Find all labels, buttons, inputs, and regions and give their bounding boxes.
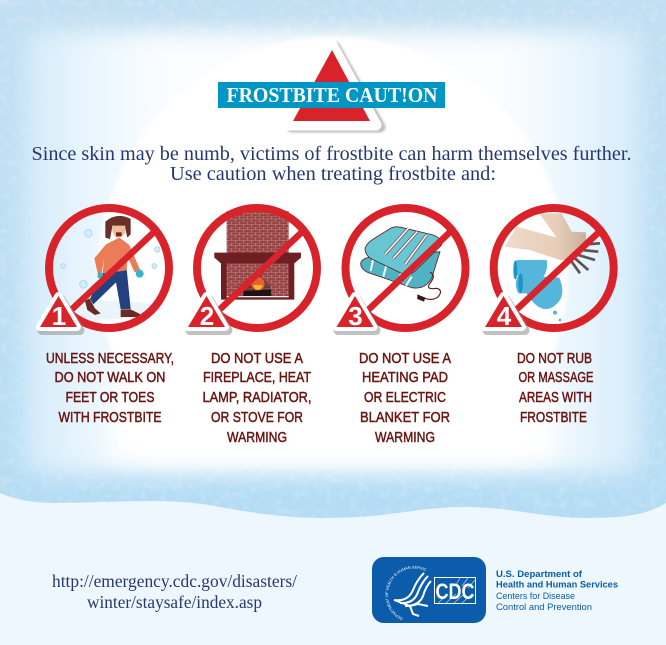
- caption: OR MASSAGE: [518, 369, 594, 386]
- icon: HHS eagle seal: DEPARTMENT OF HEALTH & HUMAN SERVICES USA: [385, 566, 426, 620]
- banner: [218, 82, 445, 108]
- caption: DO NOT RUB: [517, 350, 592, 367]
- heading: FROSTBITE CAUT!ON: [226, 83, 438, 107]
- panel: do not walk: [40, 208, 174, 426]
- caption: UNLESS NECESSARY,: [46, 350, 174, 367]
- caption: AREAS WITH: [519, 389, 592, 406]
- prohibition ring: [346, 208, 466, 328]
- caption: BLANKET FOR: [360, 409, 450, 426]
- number badge 4: 4: [497, 301, 512, 331]
- panel: do not rub: [485, 208, 614, 426]
- snow hill footer: [0, 493, 666, 645]
- caption: WARMING: [227, 429, 287, 446]
- panel: do not use heating pad: [336, 208, 466, 446]
- caption: WITH FROSTBITE: [58, 409, 162, 426]
- number badge 3: 3: [348, 301, 363, 331]
- caption: OR STOVE FOR: [211, 409, 303, 426]
- intro text: Since skin may be numb, victims of frostbite can harm themselves further.: [32, 143, 632, 165]
- caption: [202, 350, 312, 446]
- caption: FEET OR TOES: [66, 389, 154, 406]
- illustration: rubbing hands and blue gloves: [505, 213, 600, 321]
- agency name: U.S. Department of: [496, 569, 583, 580]
- caption: OR ELECTRIC: [364, 389, 446, 406]
- caption: [359, 350, 451, 446]
- caption: WARMING: [375, 429, 435, 446]
- illustration: walking person: [60, 216, 160, 319]
- caption: FIREPLACE, HEAT: [203, 369, 311, 386]
- panel: do not use fireplace: [188, 208, 317, 446]
- intro text: [32, 143, 632, 185]
- prohibition ring: [49, 208, 169, 328]
- illustration: electric blanket: [361, 227, 442, 302]
- number badge 2: 2: [200, 301, 214, 331]
- caption: DO NOT USE A: [211, 350, 303, 367]
- source url: [52, 571, 297, 612]
- intro text: Use caution when treating frostbite and:: [170, 163, 496, 185]
- agency name: Health and Human Services: [496, 580, 618, 590]
- number badge 1: [40, 296, 80, 331]
- prohibition ring: [494, 208, 614, 328]
- caption: LAMP, RADIATOR,: [202, 389, 312, 406]
- caption: DO NOT WALK ON: [54, 369, 166, 386]
- caption: [46, 350, 174, 426]
- number badge 3: [336, 296, 376, 331]
- caption: FROSTBITE: [520, 409, 587, 426]
- source url: http://emergency.cdc.gov/disasters/: [52, 571, 297, 591]
- icon: HHS eagle seal: [385, 566, 432, 620]
- icon: caution triangle: [288, 45, 380, 127]
- caption: DO NOT USE A: [359, 350, 451, 367]
- illustration: fireplace: [214, 211, 301, 300]
- agency name: Control and Prevention: [496, 602, 592, 613]
- agency name: [496, 569, 618, 613]
- icon: CDC mark: CDC: [436, 579, 475, 604]
- title badge: [218, 45, 445, 127]
- caption: HEATING PAD: [362, 369, 448, 386]
- agency name: Centers for Disease: [496, 591, 575, 602]
- prohibition ring: [197, 208, 317, 328]
- number badge 4: [485, 296, 525, 331]
- source url: winter/staysafe/index.asp: [87, 592, 262, 612]
- caption: [517, 350, 594, 426]
- number badge 2: [188, 296, 228, 331]
- number badge 1: 1: [52, 301, 66, 331]
